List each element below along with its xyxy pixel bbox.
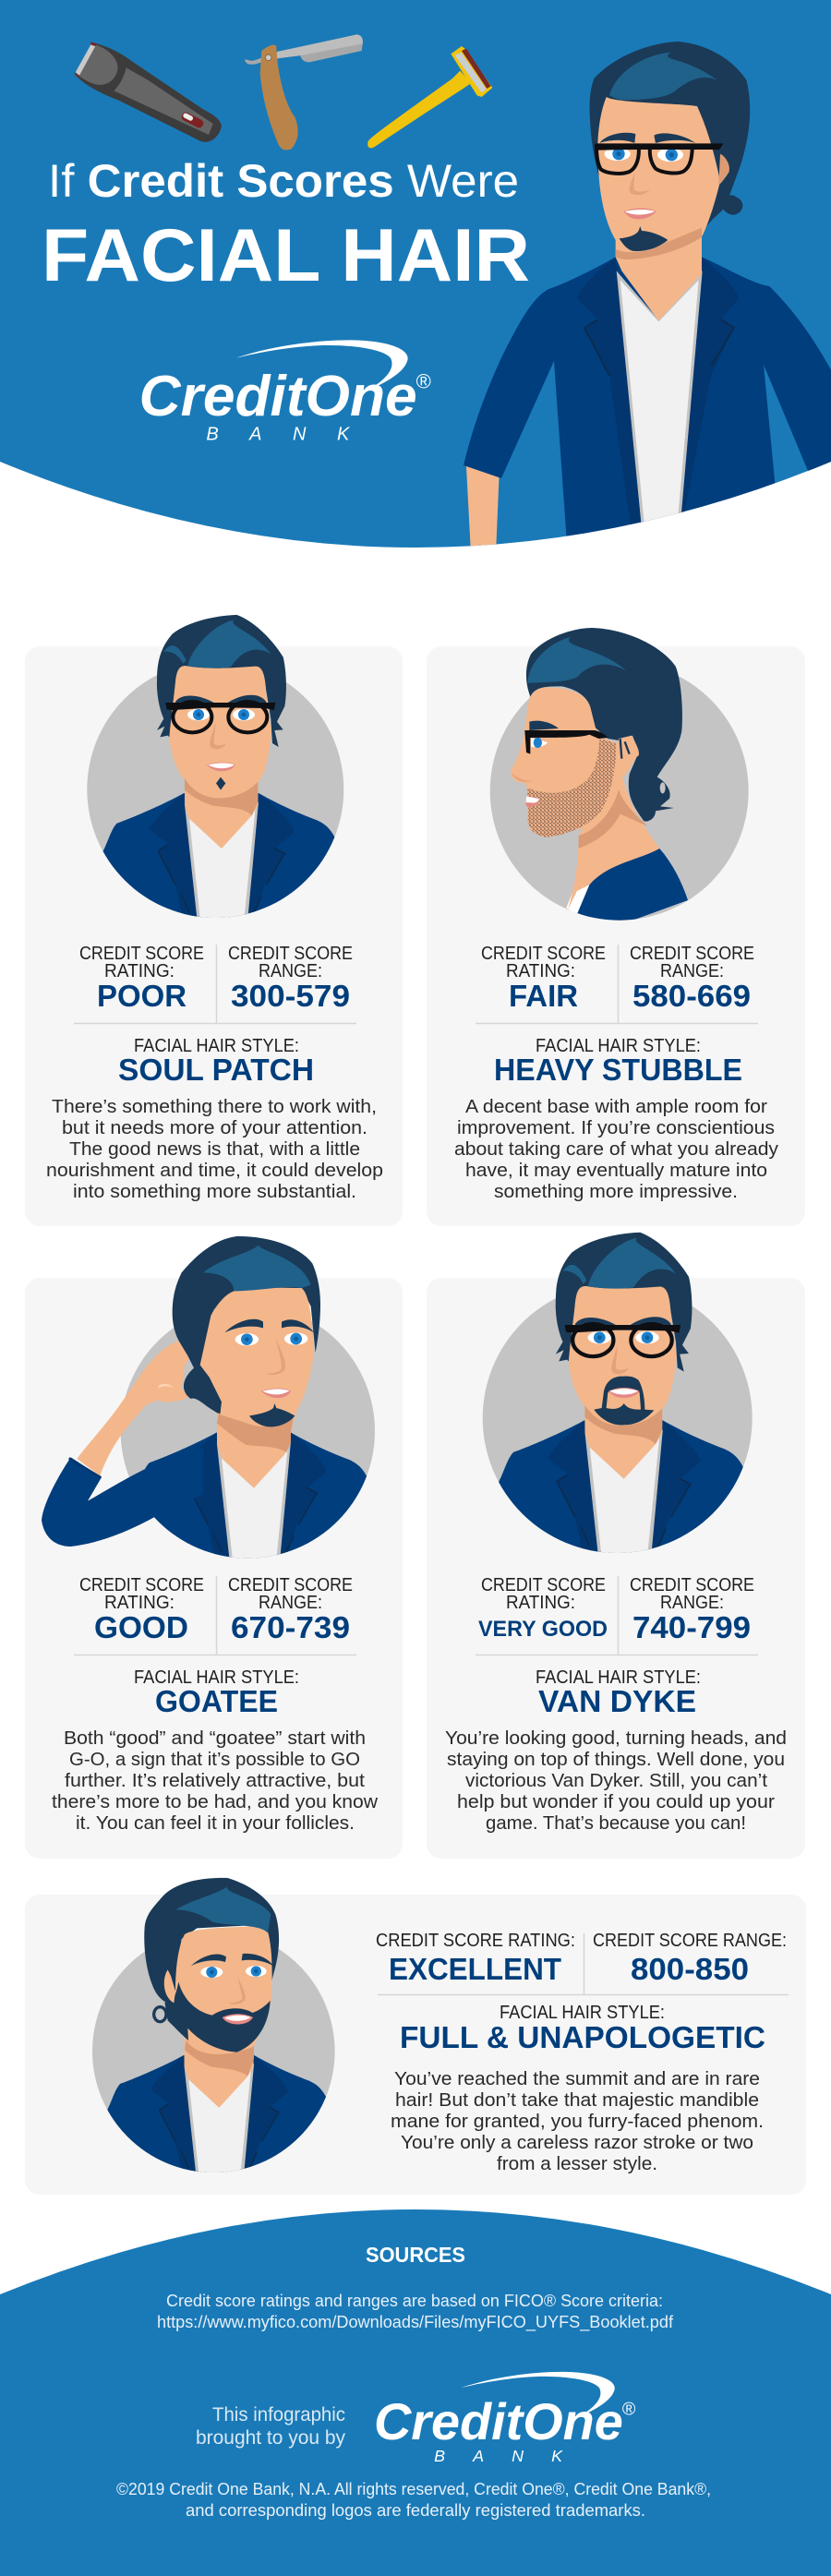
sources text: https://www.myfico.com/Downloads/Files/myFICO_UYFS_Booklet.pdf [157, 2313, 674, 2332]
sponsor line: brought to you by [196, 2427, 345, 2449]
facial hair style [134, 1667, 299, 1718]
credit score rating: CREDIT SCORE [481, 1575, 606, 1595]
description: improvement. If you’re conscientious [457, 1117, 775, 1138]
logo: Credit One Bank: BANK [206, 425, 351, 445]
credit score range: 740-799 [632, 1610, 751, 1644]
copyright: and corresponding logos are federally registered trademarks. [186, 2501, 645, 2520]
panel: heavy stubble card [427, 628, 805, 1226]
credit score range: CREDIT SCORE [228, 1575, 353, 1595]
portrait: soul patch [87, 615, 343, 918]
panel: goatee card [25, 1236, 403, 1859]
facial hair style: FACIAL HAIR STYLE: [536, 1036, 701, 1056]
card background [25, 1895, 806, 2195]
description: G-O, a sign that it’s possible to GO [69, 1749, 360, 1770]
description [46, 1096, 383, 1202]
icon: hair clipper [75, 42, 222, 142]
description: A decent base with ample room for [465, 1096, 767, 1117]
credit score rating [478, 1575, 608, 1642]
logo: Credit One Bank footer: CreditOne [374, 2393, 623, 2450]
header background [0, 0, 831, 548]
title [42, 155, 530, 297]
logo: Credit One Bank: CreditOne [139, 365, 417, 428]
credit score rating [481, 944, 606, 1013]
description [52, 1727, 378, 1834]
credit score range: CREDIT SCORE [630, 944, 754, 964]
facial hair style: VAN DYKE [538, 1684, 696, 1718]
description: into something more substantial. [73, 1181, 356, 1202]
credit score rating: RATING: [104, 1593, 175, 1613]
description: there’s more to be had, and you know [52, 1791, 378, 1812]
description: mane for granted, you furry-faced phenom. [391, 2111, 764, 2132]
credit score rating: CREDIT SCORE [79, 1575, 204, 1595]
description [445, 1727, 787, 1834]
panel: full and unapologetic card [25, 1878, 806, 2206]
description: game. That’s because you can! [486, 1812, 746, 1834]
credit score range: 800-850 [631, 1952, 749, 1986]
facial hair style: FACIAL HAIR STYLE: [134, 1667, 299, 1688]
facial hair style [536, 1667, 701, 1718]
credit score range: CREDIT SCORE [630, 1575, 754, 1595]
credit score range: RANGE: [660, 961, 724, 981]
portrait: heavy stubble profile [490, 628, 749, 925]
logo: Credit One Bank footer [374, 2372, 636, 2465]
illustration: man in blazer with goatee [464, 42, 831, 557]
credit score rating: RATING: [506, 961, 575, 981]
credit score range: CREDIT SCORE [228, 944, 353, 964]
footer background [0, 2209, 831, 2576]
credit score rating [79, 1575, 204, 1644]
credit score range [228, 1575, 353, 1644]
card background [427, 1278, 805, 1859]
credit score range: RANGE: [660, 1593, 724, 1613]
credit score rating: CREDIT SCORE RATING: [376, 1931, 575, 1951]
facial hair style: GOATEE [155, 1684, 278, 1718]
sponsor line [196, 2404, 345, 2449]
card background [427, 646, 805, 1226]
description: You’re only a careless razor stroke or two [401, 2132, 753, 2153]
facial hair style: HEAVY STUBBLE [494, 1053, 742, 1087]
portrait: van dyke [483, 1233, 753, 1589]
description: about taking care of what you already [454, 1138, 779, 1160]
description: You’re looking good, turning heads, and [445, 1727, 787, 1749]
credit score rating [79, 944, 204, 1013]
credit score range: 300-579 [231, 979, 350, 1013]
credit score range: 670-739 [231, 1610, 350, 1644]
icon: straight razor [245, 34, 363, 150]
description [454, 1096, 779, 1202]
icon: disposable razor [367, 46, 492, 148]
description: victorious Van Dyker. Still, you can’t [465, 1770, 767, 1791]
facial hair style: FACIAL HAIR STYLE: [536, 1667, 701, 1688]
credit score range [228, 944, 353, 1013]
credit score range [630, 1575, 754, 1644]
copyright: ©2019 Credit One Bank, N.A. All rights reserved, Credit One®, Credit One Bank®, [116, 2480, 711, 2498]
credit score rating: POOR [97, 979, 187, 1013]
credit score range: CREDIT SCORE RANGE: [593, 1931, 787, 1951]
logo: Credit One Bank [139, 340, 431, 445]
copyright [116, 2480, 711, 2520]
credit score rating: CREDIT SCORE [481, 944, 606, 964]
facial hair style [400, 2003, 765, 2054]
description: further. It’s relatively attractive, but [65, 1770, 365, 1791]
credit score rating: FAIR [509, 979, 578, 1013]
description: The good news is that, with a little [69, 1138, 360, 1160]
title: FACIAL HAIR [42, 214, 530, 297]
title: If Credit Scores Were [48, 155, 519, 207]
card background [25, 646, 403, 1226]
card background [25, 1278, 403, 1859]
credit score rating: RATING: [506, 1593, 575, 1613]
description: Both “good” and “goatee” start with [64, 1727, 366, 1749]
description: nourishment and time, it could develop [46, 1160, 383, 1181]
logo: Credit One Bank footer: BANK [434, 2447, 563, 2465]
description: staying on top of things. Well done, you [447, 1749, 785, 1770]
credit score range: RANGE: [259, 1593, 322, 1613]
facial hair style: FULL & UNAPOLOGETIC [400, 2020, 765, 2054]
portrait: full beard [92, 1878, 335, 2206]
panel: van dyke card [427, 1233, 805, 1859]
credit score range [593, 1931, 787, 1986]
description: You’ve reached the summit and are in rare [394, 2068, 760, 2089]
description: There’s something there to work with, [52, 1096, 377, 1117]
facial hair style: FACIAL HAIR STYLE: [500, 2003, 665, 2023]
description: but it needs more of your attention. [62, 1117, 367, 1138]
credit score rating: EXCELLENT [389, 1952, 561, 1986]
credit score rating: GOOD [94, 1610, 188, 1644]
description [391, 2068, 764, 2174]
portrait: goatee with raised arm [42, 1236, 375, 1592]
logo: Credit One Bank footer: ® [622, 2400, 636, 2420]
icons: grooming tools [75, 34, 492, 150]
credit score range: 580-669 [632, 979, 751, 1013]
description: something more impressive. [494, 1181, 738, 1202]
facial hair style: SOUL PATCH [118, 1053, 314, 1087]
description: it. You can feel it in your follicles. [76, 1812, 355, 1834]
description: from a lesser style. [497, 2153, 657, 2174]
credit score rating [376, 1931, 575, 1986]
sources text [157, 2292, 674, 2332]
credit score rating: RATING: [104, 961, 175, 981]
sources heading: SOURCES [366, 2243, 465, 2267]
sources text: Credit score ratings and ranges are based on FICO® Score criteria: [166, 2292, 663, 2310]
credit score range: RANGE: [259, 961, 322, 981]
facial hair style [494, 1036, 742, 1087]
description: help but wonder if you could up your [457, 1791, 775, 1812]
credit score rating: CREDIT SCORE [79, 944, 204, 964]
sponsor line: This infographic [212, 2404, 345, 2426]
description: hair! But don’t take that majestic mandible [395, 2089, 759, 2111]
facial hair style: FACIAL HAIR STYLE: [134, 1036, 299, 1056]
panel: soul patch card [25, 615, 403, 1226]
credit score range [630, 944, 754, 1013]
description: have, it may eventually mature into [465, 1160, 767, 1181]
facial hair style [118, 1036, 314, 1087]
logo: Credit One Bank: ® [416, 370, 431, 393]
credit score rating: VERY GOOD [478, 1617, 608, 1642]
